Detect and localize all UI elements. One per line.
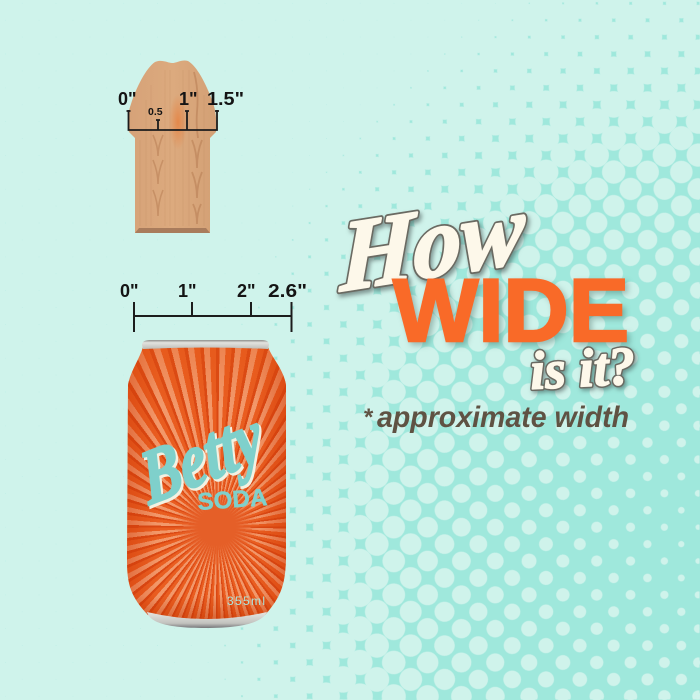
wood sample with ruler	[118, 60, 244, 233]
is it?: is it?	[528, 336, 636, 401]
ruler: can: 1"	[178, 281, 197, 301]
ruler: wood: 0.5	[148, 106, 163, 118]
approximate width note: approximate width	[377, 401, 629, 434]
volume: 355ml	[227, 594, 265, 608]
ruler: can	[120, 281, 307, 332]
ruler: can: 2.6"	[268, 281, 307, 301]
ruler: can: 0"	[120, 281, 139, 301]
ruler: wood: 0"	[118, 89, 137, 109]
approximate width note: *	[363, 404, 374, 431]
wood shape	[128, 60, 216, 233]
ruler: wood	[118, 89, 244, 130]
WIDE: WIDE	[393, 260, 629, 360]
is it?: is it?	[528, 336, 636, 401]
can lid, base and label text	[132, 340, 273, 628]
ruler: can: 2"	[237, 281, 256, 301]
soda can	[127, 340, 286, 628]
lid	[142, 340, 269, 349]
ruler: wood: 1.5"	[207, 89, 244, 109]
base	[147, 612, 267, 628]
ruler: wood: 1"	[179, 89, 198, 109]
headline	[336, 190, 640, 434]
can body with sunburst	[127, 348, 286, 619]
SODA: SODA	[197, 484, 268, 516]
